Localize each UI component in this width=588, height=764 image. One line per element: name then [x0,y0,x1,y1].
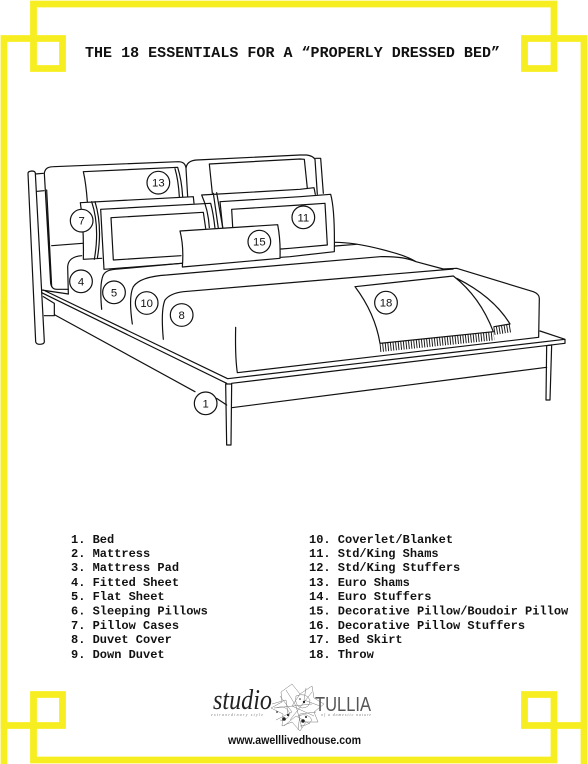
essentials list: left column: 9. Down Duvet [71,648,165,662]
callout 7 [70,209,93,232]
essentials list: right column: 10. Coverlet/Blanket [309,533,453,547]
essentials list: left column: 7. Pillow Cases [71,619,179,633]
bed illustration [28,155,565,445]
essentials list: left column: 5. Flat Sheet [71,590,165,604]
callout 10 [135,292,158,314]
callout 4: 4 [78,276,84,288]
callout 1: 1 [203,398,209,410]
corner: top left [4,4,300,764]
headboard post [28,171,44,344]
essentials list: right column: 17. Bed Skirt [309,633,403,647]
corner: bottom left [4,300,300,760]
callout 7: 7 [79,216,85,228]
throw fringe [380,336,494,348]
bed frame [42,290,565,408]
logo word: tullia: TULLIA [315,694,372,716]
euro shams [83,159,307,202]
logo tagline left: extraordinary style [211,713,263,717]
essentials list: left column: 2. Mattress [71,547,150,561]
essentials list: left column: 1. Bed [71,533,114,547]
callout 18: 18 [380,298,392,310]
callout 5 [103,281,125,304]
callout 8 [170,304,193,326]
headboard cushions [44,155,323,289]
bedding layers [68,242,539,373]
logo word: studio: studio [213,685,272,716]
front leg [226,384,232,445]
decorative pillow [180,225,280,267]
callout 11 [292,206,315,229]
callout 15: 15 [253,237,266,249]
number callouts [70,171,397,415]
essentials list: right column [309,533,569,662]
throw blanket [355,276,510,343]
callout 1 [194,392,217,415]
standard shams [101,194,334,269]
corner: top right [300,4,584,764]
callout 5: 5 [111,287,117,299]
logo tagline right: of a domestic nature [321,713,371,717]
callout 13 [147,171,170,194]
essentials list: right column: 12. Std/King Stuffers [309,561,460,575]
essentials list: right column: 16. Decorative Pillow Stuffers [309,619,525,633]
essentials list: left column: 8. Duvet Cover [71,633,172,647]
essentials list: left column: 6. Sleeping Pillows [71,604,208,618]
essentials list: right column: 11. Std/King Shams [309,547,439,561]
logo: studio tullia [211,684,372,731]
callout 15 [248,230,271,253]
essentials list: right column: 14. Euro Stuffers [309,590,431,604]
logo flower [271,684,324,731]
callout 4 [70,270,92,293]
essentials list: right column: 18. Throw [309,648,375,662]
title: THE 18 ESSENTIALS FOR A “PROPERLY DRESSED BED” [85,45,500,62]
callout 13: 13 [152,178,165,190]
website url: www.awelllivedhouse.com [227,735,361,747]
corner: bottom right [300,300,584,760]
pillow cases [80,188,315,259]
right leg [546,345,552,400]
essentials list: right column: 13. Euro Shams [309,576,410,590]
callout 10: 10 [140,298,153,310]
callout 18 [375,291,397,314]
callout 11: 11 [297,212,309,224]
essentials list: right column: 15. Decorative Pillow/Boudoir Pillow [309,604,569,618]
essentials list: left column: 3. Mattress Pad [71,561,179,575]
essentials list: left column [71,533,208,662]
callout 8: 8 [179,310,185,322]
essentials list: left column: 4. Fitted Sheet [71,576,179,590]
